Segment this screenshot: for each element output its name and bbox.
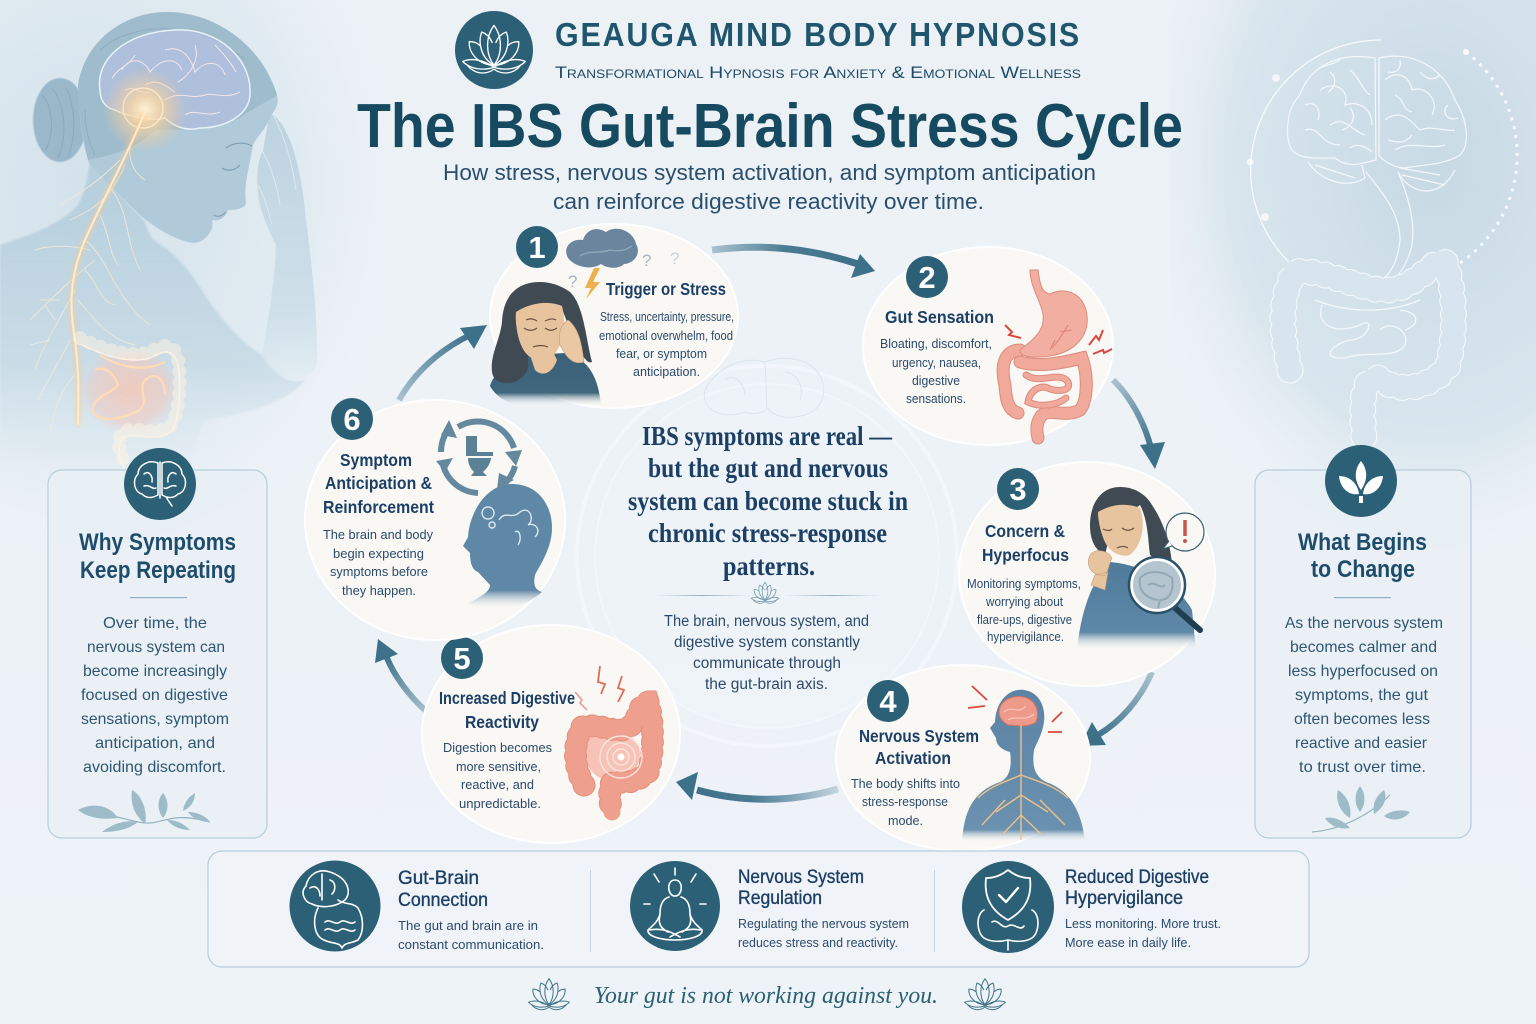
text: Nervous System (738, 867, 864, 888)
arrow 3 to 4 (1080, 672, 1152, 746)
body text: Over time, the (103, 615, 207, 632)
magnifying glass (1129, 557, 1200, 630)
text: constant communication. (398, 937, 544, 952)
central statement: IBS symptoms are real — (642, 421, 893, 451)
worried woman (1077, 487, 1196, 650)
item: gut-brain connection (290, 860, 544, 952)
illustration: woman with glowing brain and gut (0, 12, 317, 480)
hair bun (33, 78, 87, 162)
arrow 1 to 2 (712, 247, 875, 278)
stomach and intestines (1003, 270, 1087, 438)
head (78, 12, 278, 243)
arrow 6 to 1 (399, 325, 487, 400)
step 2: gut sensation (863, 247, 1113, 445)
step text (880, 307, 994, 406)
hair (78, 12, 277, 160)
body with nerves (962, 690, 1085, 842)
body text: focused on digestive (81, 687, 228, 704)
icon: leaves (1312, 786, 1410, 832)
gut-brain axis text: digestive system constantly (674, 634, 860, 651)
step 1: trigger or stress (490, 224, 738, 408)
step 3: concern and hyperfocus (959, 462, 1215, 686)
brain (99, 30, 250, 129)
body text: As the nervous system (1285, 615, 1443, 632)
forearm and hand (257, 112, 317, 379)
heading: What Begins (1298, 529, 1427, 556)
step text: Hyperfocus (982, 545, 1069, 565)
step text: fear, or symptom (616, 347, 707, 361)
question marks: ? (568, 272, 577, 291)
icon: sprout (1325, 445, 1397, 517)
step text: stress-response (862, 795, 948, 809)
brain outline (1287, 56, 1466, 191)
step text: Stress, uncertainty, pressure, (600, 310, 734, 324)
colon (1283, 261, 1454, 438)
step 3: concern and hyperfocus: 3 (1009, 472, 1027, 507)
central statement: system can become stuck in (628, 486, 908, 516)
step text: Bloating, discomfort, (880, 337, 992, 351)
step text: Trigger or Stress (606, 279, 726, 299)
heading: Keep Repeating (80, 557, 236, 584)
facial features (214, 143, 252, 216)
heading (79, 529, 236, 584)
central statement: patterns. (723, 551, 815, 581)
silhouette torso (0, 160, 305, 480)
body text: becomes calmer and (1290, 639, 1437, 656)
text (398, 868, 544, 952)
step text: Symptom (340, 450, 412, 470)
step text (599, 279, 734, 379)
step text: hypervigilance. (987, 630, 1064, 644)
body text: become increasingly (83, 663, 227, 680)
body text: nervous system can (87, 639, 225, 656)
step text: reactive, and (461, 778, 534, 792)
gut-brain axis text: The brain, nervous system, and (664, 613, 869, 630)
text: Regulating the nervous system (738, 916, 909, 931)
halo ring (1246, 40, 1517, 272)
central statement: chronic stress-response (648, 518, 887, 548)
step text: more sensitive, (456, 760, 541, 774)
tagline text: Your gut is not working against you. (594, 983, 938, 1009)
bottom benefits bar (208, 851, 1309, 967)
step text: Digestion becomes (443, 741, 552, 755)
text: reduces stress and reactivity. (738, 935, 898, 950)
body text (81, 615, 229, 776)
body text: sensations, symptom (81, 711, 229, 728)
step text: Reinforcement (323, 497, 434, 517)
step text (967, 521, 1081, 644)
step text: Reactivity (465, 712, 539, 732)
central statement (628, 421, 908, 581)
step text (439, 688, 575, 811)
text: More ease in daily life. (1065, 935, 1191, 950)
panel: what begins to change (1255, 445, 1471, 838)
panel: why symptoms keep repeating (48, 448, 267, 838)
step text: anticipation. (633, 365, 700, 379)
icon: left lotus (529, 979, 569, 1010)
body text: anticipation, and (95, 735, 215, 752)
organisation name: GEAUGA MIND BODY HYPNOSIS (555, 16, 1081, 53)
illustration: right brain-gut line drawing (1246, 40, 1517, 438)
alert sparks (968, 686, 1062, 732)
text: The gut and brain are in (398, 918, 538, 933)
cycle arrows (375, 247, 1165, 800)
pain sparks (575, 666, 624, 710)
tagline: Transformational Hypnosis for Anxiety & Emotional Wellness (555, 63, 1081, 82)
pain sparks (1005, 325, 1112, 354)
arrow 2 to 3 (1113, 380, 1165, 469)
central background rings (577, 358, 957, 746)
text: Regulation (738, 888, 822, 909)
text (1065, 867, 1221, 950)
icon: meditating figure (630, 861, 720, 951)
footer tagline (529, 979, 1005, 1010)
text: Less monitoring. More trust. (1065, 916, 1221, 931)
step 4: nervous system activation (836, 665, 1090, 851)
icon: brain (124, 448, 196, 520)
step text: begin expecting (333, 547, 424, 561)
step text: Nervous System (859, 726, 979, 746)
glow (103, 68, 187, 152)
step 6: symptom anticipation and reinforcement (305, 398, 565, 640)
speech bubble (1163, 513, 1204, 551)
text: Hypervigilance (1065, 888, 1183, 909)
item: reduced digestive hypervigilance (962, 861, 1221, 953)
inflamed colon (575, 702, 652, 812)
step 6: symptom anticipation and reinforcement: 6 (343, 402, 361, 437)
step text: flare-ups, digestive (977, 613, 1072, 627)
heading: to Change (1311, 556, 1415, 583)
brain stem (1366, 172, 1413, 281)
heading (1298, 529, 1427, 583)
subtitle: can reinforce digestive reactivity over time. (553, 189, 984, 214)
text: Gut-Brain (398, 868, 479, 889)
arrow 5 to 6 (375, 639, 427, 712)
step text: they happen. (342, 584, 416, 598)
gut-brain axis text (664, 613, 869, 693)
step text: sensations. (906, 392, 966, 406)
step text: digestive (912, 374, 960, 388)
step text: Concern & (985, 521, 1065, 541)
step 2: gut sensation: 2 (918, 260, 936, 295)
body text: often becomes less (1294, 711, 1430, 728)
subtitle (443, 160, 1096, 214)
step text: Monitoring symptoms, (967, 577, 1081, 591)
step 4: nervous system activation: 4 (879, 684, 897, 719)
question marks: ? (642, 251, 651, 270)
number badge: 1 (528, 230, 546, 265)
step text: Anticipation & (325, 473, 432, 493)
step text: emotional overwhelm, food (599, 329, 733, 343)
spine (71, 112, 145, 425)
faint central brain (704, 358, 824, 417)
step text (323, 450, 434, 598)
step text: Activation (875, 748, 951, 768)
icon: brain and gut (290, 860, 380, 952)
intestines (80, 338, 180, 468)
text (738, 867, 909, 950)
gut-brain axis text: communicate through (693, 655, 841, 672)
question marks (568, 249, 679, 291)
icon: leaves (78, 790, 210, 832)
nerves (30, 135, 150, 430)
small intestine (1315, 300, 1420, 358)
text: Reduced Digestive (1065, 867, 1209, 888)
body text: reactive and easier (1295, 735, 1428, 752)
gut-brain axis text: the gut-brain axis. (705, 676, 828, 693)
title: The IBS Gut-Brain Stress Cycle (357, 92, 1183, 161)
arrow 4 to 5 (676, 772, 838, 800)
step text: urgency, nausea, (892, 356, 981, 370)
body text: symptoms, the gut (1295, 687, 1429, 704)
central statement: but the gut and nervous (648, 453, 888, 483)
head profile (463, 484, 552, 609)
step 5: increased digestive reactivity (422, 625, 680, 843)
lotus divider (655, 582, 880, 603)
body text: less hyperfocused on (1288, 663, 1438, 680)
body text: to trust over time. (1299, 759, 1426, 776)
icon: shield and gut (962, 861, 1054, 953)
header logo (455, 11, 533, 89)
icon: right lotus (965, 979, 1005, 1010)
step text: mode. (888, 814, 923, 828)
storm cloud (566, 229, 638, 299)
body text: avoiding discomfort. (83, 759, 226, 776)
step text: unpredictable. (459, 797, 541, 811)
step text: Gut Sensation (885, 307, 994, 327)
body text (1285, 615, 1443, 776)
subtitle: How stress, nervous system activation, and symptom anticipation (443, 160, 1096, 185)
item: nervous system regulation (630, 861, 909, 951)
step text: worrying about (985, 595, 1063, 609)
heading: Why Symptoms (79, 529, 236, 556)
text: Connection (398, 890, 488, 911)
step text: Increased Digestive (439, 688, 575, 708)
question marks: ? (670, 249, 679, 268)
step text (851, 726, 979, 828)
step 5: increased digestive reactivity: 5 (453, 641, 471, 676)
step text: The brain and body (323, 528, 434, 542)
woman (490, 282, 601, 406)
number badge (516, 226, 558, 268)
toilet cycle (436, 420, 522, 493)
step text: The body shifts into (851, 777, 960, 791)
central message (628, 421, 908, 693)
step text: symptoms before (330, 565, 428, 579)
